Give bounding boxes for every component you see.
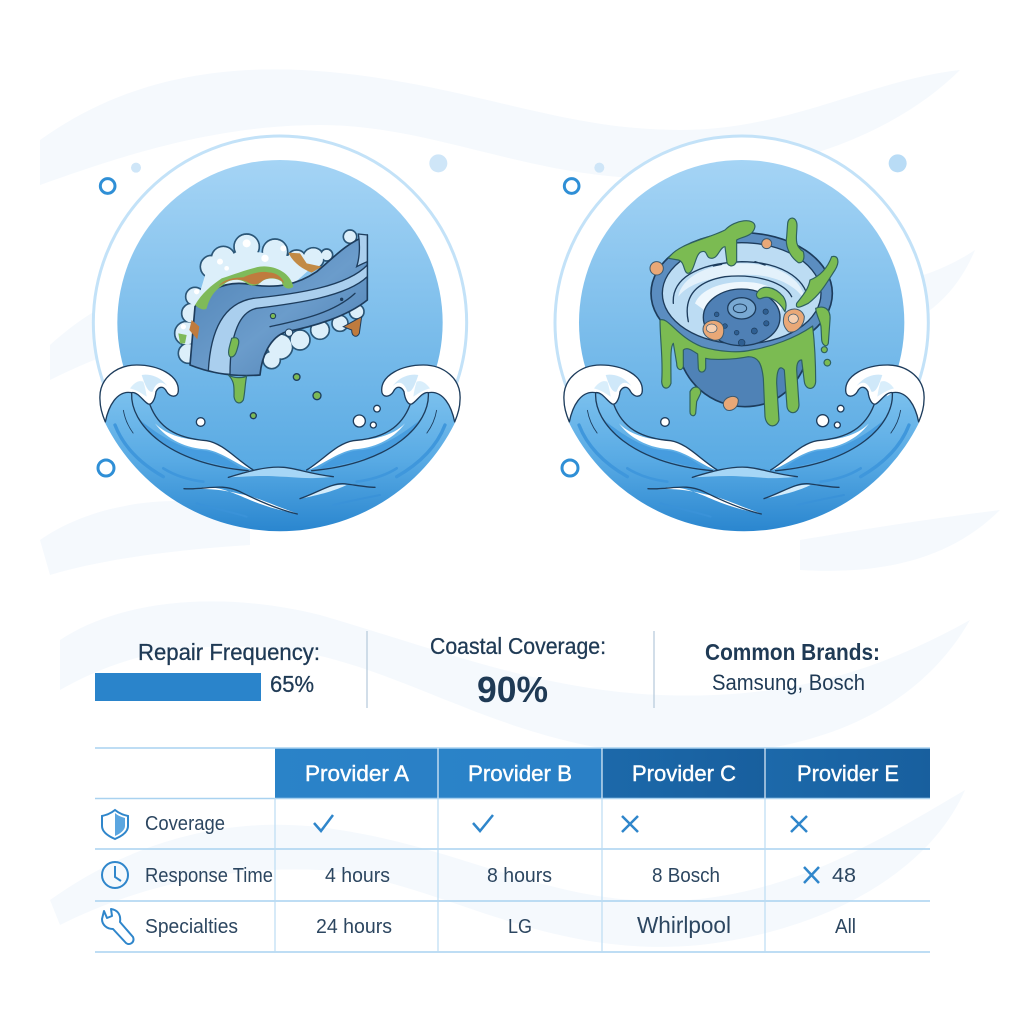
icon: wrench bbox=[102, 909, 133, 944]
rust and algae bbox=[195, 266, 293, 309]
stat: coastal coverage: Coastal Coverage: bbox=[430, 633, 606, 659]
stat: common brands bbox=[705, 639, 880, 695]
outer ring bbox=[93, 136, 467, 509]
icon: check marks bbox=[314, 815, 493, 831]
comparison table bbox=[95, 748, 930, 952]
stat: repair frequency: Repair Frequency: bbox=[138, 639, 320, 665]
icon: slime covered drain bowl bbox=[650, 218, 838, 426]
stat: coastal coverage bbox=[430, 633, 606, 710]
row: specialties: Specialties bbox=[145, 916, 238, 938]
row: specialties: Whirlpool bbox=[637, 912, 731, 938]
waves bbox=[100, 365, 460, 531]
row: specialties: All bbox=[835, 916, 856, 938]
outer ring bbox=[555, 136, 928, 509]
stat: common brands: Samsung, Bosch bbox=[712, 670, 865, 695]
icon: shield bbox=[102, 810, 128, 839]
sky circle bbox=[117, 160, 443, 485]
panel: right illustration, slimy drain bowl in the sea bbox=[555, 136, 928, 531]
hose highlight stripe bbox=[208, 265, 367, 374]
table header: Provider E bbox=[797, 761, 899, 786]
slime strand upper right bbox=[786, 218, 804, 263]
row: response time: 8 hours bbox=[487, 865, 552, 887]
slime front band bbox=[660, 320, 816, 426]
stat: coastal coverage: 90% bbox=[477, 669, 548, 710]
row: specialties bbox=[102, 909, 856, 944]
icon: decorative bubbles bbox=[562, 154, 907, 476]
table header: Provider C bbox=[632, 761, 736, 786]
table header: Provider B bbox=[468, 761, 572, 786]
barnacles bbox=[650, 239, 804, 410]
sky circle bbox=[579, 160, 904, 485]
icon: algae droplets bbox=[250, 374, 321, 419]
row: response time: 8 Bosch bbox=[652, 865, 720, 887]
icon: air bubbles bbox=[661, 405, 844, 428]
panel: left illustration, clogged and corroded hose in the sea bbox=[93, 136, 467, 531]
bowl base bbox=[677, 343, 810, 407]
table header bbox=[275, 748, 930, 798]
icon: cross mark bbox=[804, 867, 819, 883]
icon: decorative bubbles bbox=[98, 154, 447, 476]
row: specialties: LG bbox=[508, 916, 532, 938]
row: response time: 4 hours bbox=[325, 865, 390, 887]
icon: clock bbox=[102, 862, 128, 888]
slime top bbox=[668, 221, 755, 273]
icon: cross marks bbox=[622, 816, 807, 832]
row: response time: Response Time bbox=[145, 865, 273, 887]
waves bbox=[564, 365, 924, 531]
icon: corroded hose with foam bbox=[175, 230, 367, 403]
stat: common brands: Common Brands: bbox=[705, 639, 880, 665]
drain bbox=[703, 289, 780, 346]
row: coverage bbox=[102, 810, 807, 839]
progress bar bbox=[95, 673, 261, 701]
row: coverage: Coverage bbox=[145, 813, 225, 835]
foam bbox=[175, 230, 364, 369]
icon: air bubbles bbox=[196, 405, 380, 428]
row: specialties: 24 hours bbox=[316, 916, 392, 938]
hose body bbox=[190, 235, 367, 376]
table header: Provider A bbox=[305, 761, 409, 786]
stat: repair frequency bbox=[95, 639, 320, 701]
bowl interior bbox=[662, 243, 821, 344]
row: response time: 48 bbox=[832, 865, 856, 887]
row: response time bbox=[102, 862, 856, 888]
value: 65% bbox=[270, 671, 314, 697]
rim bbox=[651, 233, 832, 354]
